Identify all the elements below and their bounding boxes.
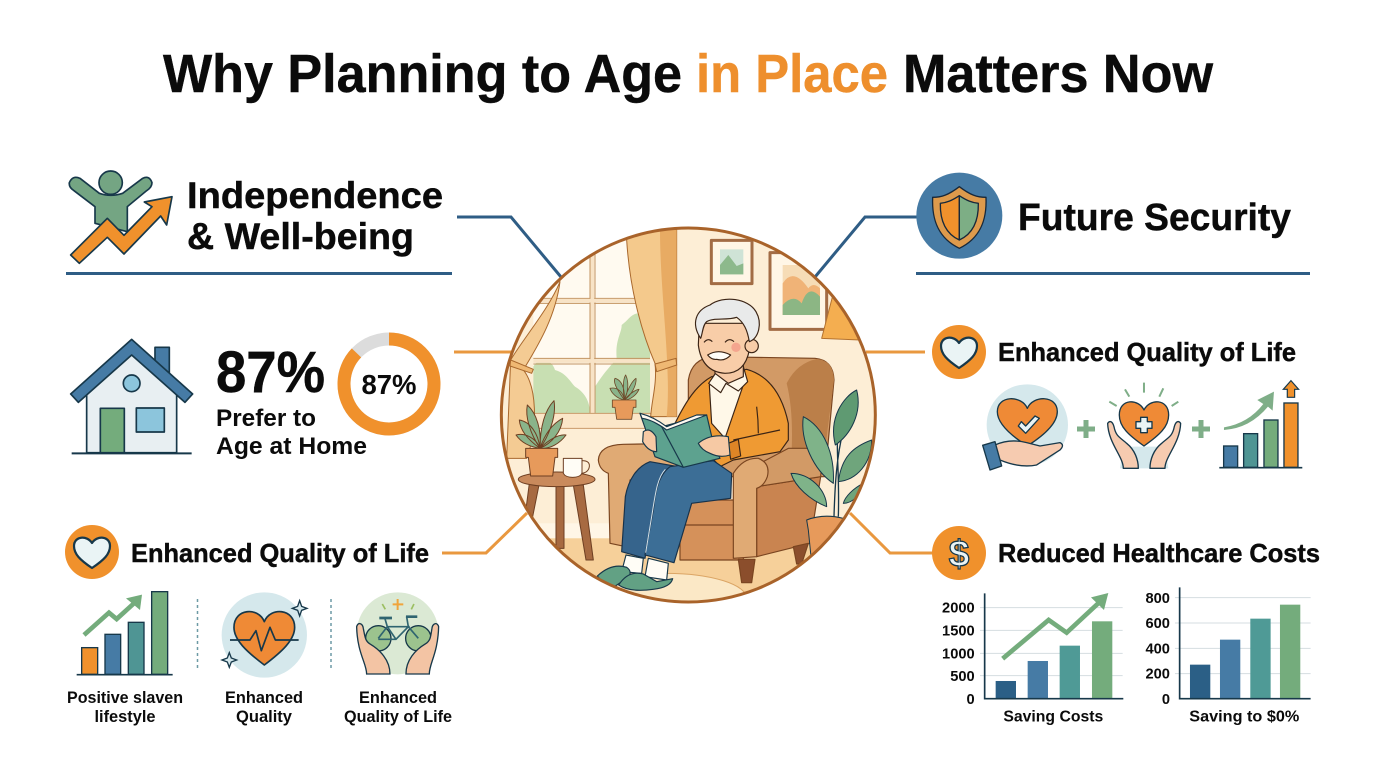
- label: positive lifestyle: lifestyle: [94, 708, 156, 726]
- icon: dollar badge: [932, 526, 986, 580]
- title: Matters Now: [903, 44, 1214, 104]
- chart: saving costs: [942, 593, 1123, 725]
- plus sign: [1192, 420, 1210, 438]
- heading: independence: Independence: [187, 175, 443, 216]
- title: [163, 44, 1214, 104]
- donut chart: 87%: [361, 369, 417, 400]
- icon: heart with pulse: [222, 592, 307, 678]
- curtains: [507, 230, 677, 458]
- stat label: Age at Home: [216, 433, 367, 460]
- icon: rising bars with arrows: [1219, 381, 1302, 468]
- cardigan and shirt: [675, 367, 788, 467]
- central illustration: older man reading in armchair: [500, 226, 877, 604]
- chart: saving to $0%: 600: [1146, 616, 1170, 632]
- icon: person with rising arrow: [69, 171, 172, 263]
- chart: saving to $0%: 400: [1146, 641, 1170, 657]
- label: positive lifestyle: Positive slaven: [67, 689, 183, 707]
- circle rim: [501, 228, 875, 602]
- chart: saving to $0%: 800: [1146, 591, 1170, 607]
- big number: 87%: [216, 340, 325, 405]
- chart: saving costs: 1000: [942, 646, 975, 662]
- icon: dollar badge: $: [949, 533, 970, 574]
- floor: [538, 524, 810, 600]
- chart: saving to $0%: [1146, 587, 1311, 725]
- heading: Enhanced Quality of Life: [131, 538, 429, 568]
- armchair back: [688, 357, 834, 477]
- side table with plant and cup: [516, 401, 595, 560]
- label: enhanced quality of life: [344, 689, 452, 726]
- donut chart: [344, 339, 434, 429]
- icon: rising bars: [77, 592, 173, 675]
- book and hands: [640, 413, 730, 467]
- panel: future security header: [916, 173, 1310, 275]
- divider dots: [198, 599, 331, 670]
- chart: saving costs: 500: [950, 669, 975, 685]
- window: [520, 240, 653, 428]
- panel: reduced healthcare costs: [932, 526, 1320, 725]
- socks and slippers: [597, 555, 673, 590]
- head: [696, 299, 759, 383]
- heading: Enhanced Quality of Life: [998, 337, 1296, 367]
- stat label: Prefer to: [216, 405, 316, 432]
- title: Why Planning to Age: [163, 44, 682, 104]
- lamp: [822, 293, 860, 340]
- icon: hands with medical heart: [1108, 383, 1181, 468]
- panel: 87 percent statistic: [71, 339, 434, 460]
- icon: heart badge: [65, 525, 119, 579]
- chair seat and arms: [598, 443, 823, 583]
- connector lines: [442, 217, 935, 553]
- panel: enhanced quality of life, right: [932, 325, 1302, 470]
- heading: Reduced Healthcare Costs: [998, 538, 1320, 568]
- label: enhanced quality: [225, 689, 303, 726]
- title: in Place: [696, 44, 888, 104]
- chart: saving to $0%: 0: [1162, 692, 1170, 708]
- icon: heart badge: [932, 325, 986, 379]
- heading: well-being: & Well-being: [187, 216, 414, 257]
- icon: bicycle in hands: [357, 592, 439, 674]
- stat label: [216, 405, 367, 460]
- chart: saving costs: 2000: [942, 601, 975, 617]
- chart: saving costs: Saving Costs: [1003, 708, 1103, 725]
- icon: hand holding heart: [983, 384, 1068, 470]
- label: enhanced quality of life: Quality of Life: [344, 708, 452, 726]
- floor plant: [791, 390, 872, 563]
- label: enhanced quality of life: Enhanced: [359, 689, 437, 707]
- icon: shield badge: [916, 173, 1002, 259]
- heading: Future Security: [1018, 197, 1291, 239]
- framed pictures: [711, 240, 827, 329]
- trousers: [622, 461, 732, 563]
- label: positive lifestyle: [67, 689, 183, 726]
- chart: saving to $0%: 200: [1146, 667, 1170, 683]
- label: enhanced quality: Quality: [236, 708, 293, 726]
- divider rule: [916, 272, 1310, 275]
- plus sign: [1077, 420, 1095, 438]
- window plant: [610, 375, 639, 419]
- label: enhanced quality: Enhanced: [225, 689, 303, 707]
- icon: house: [71, 339, 193, 453]
- divider rule: [66, 272, 452, 275]
- panel: independence and well-being header: [66, 171, 452, 275]
- chart: saving costs: 1500: [942, 624, 975, 640]
- chart: saving to $0%: Saving to $0%: [1189, 708, 1299, 725]
- panel: enhanced quality of life, left: [65, 525, 452, 726]
- chart: saving costs: 0: [967, 692, 975, 708]
